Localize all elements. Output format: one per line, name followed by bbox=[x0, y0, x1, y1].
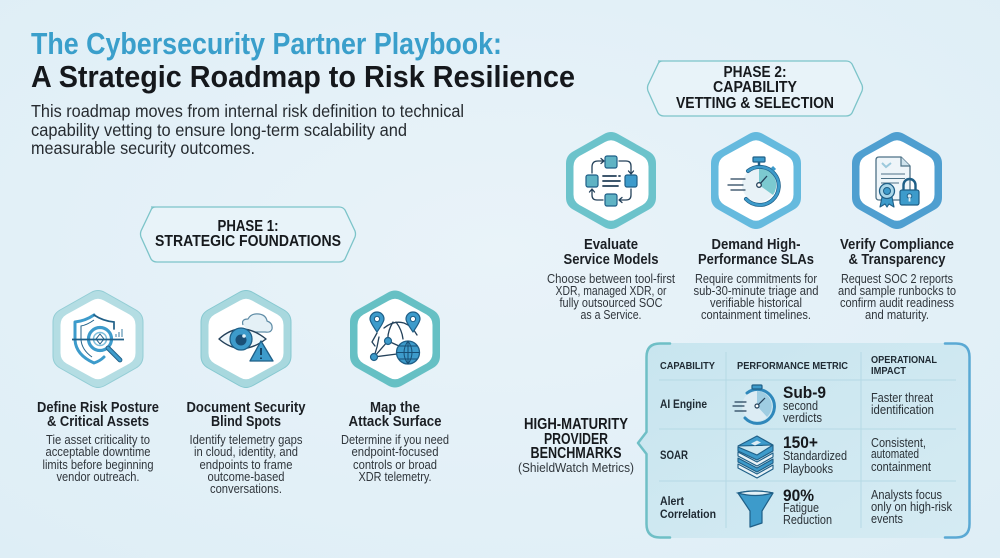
heading: Demand High- bbox=[712, 237, 801, 253]
phase 2 heading bbox=[648, 61, 862, 116]
card: define risk posture bbox=[37, 290, 159, 484]
icon: funnel bbox=[738, 491, 773, 527]
title bbox=[31, 26, 575, 94]
row: Alert Correlation bbox=[660, 486, 952, 527]
benchmarks table panel bbox=[638, 343, 970, 538]
heading: Performance SLAs bbox=[698, 252, 814, 268]
description bbox=[42, 433, 154, 484]
phase 2 heading: CAPABILITY bbox=[713, 79, 798, 96]
description: outcome-based bbox=[208, 470, 285, 484]
intro text bbox=[31, 101, 464, 158]
description: confirm audit readiness bbox=[840, 296, 954, 310]
description: controls or broad bbox=[353, 458, 437, 472]
description: Tie asset criticality to bbox=[46, 433, 150, 447]
heading bbox=[37, 400, 159, 430]
row: Alert Correlation: Reduction bbox=[783, 512, 832, 527]
heading bbox=[698, 237, 814, 268]
heading bbox=[840, 237, 954, 268]
row: SOAR: automated bbox=[871, 446, 919, 461]
description: sub-30-minute triage and bbox=[694, 284, 819, 298]
heading: Verify Compliance bbox=[840, 237, 954, 253]
row: AI Engine: verdicts bbox=[783, 410, 822, 425]
row: AI Engine: Faster threat bbox=[871, 390, 933, 405]
phase 1 heading: PHASE 1: bbox=[218, 218, 278, 235]
description: XDR, managed XDR, or bbox=[556, 284, 666, 298]
heading: Attack Surface bbox=[348, 414, 442, 430]
title: A Strategic Roadmap to Risk Resilience bbox=[31, 59, 575, 94]
description bbox=[694, 272, 819, 322]
card: demand SLAs bbox=[694, 132, 819, 322]
heading bbox=[564, 237, 658, 268]
description: and sample runbocks to bbox=[838, 284, 956, 298]
intro text: This roadmap moves from internal risk definition to technical bbox=[31, 101, 464, 121]
row: SOAR: containment bbox=[871, 459, 931, 474]
benchmarks side label: HIGH-MATURITY bbox=[524, 416, 629, 433]
benchmarks side label: BENCHMARKS bbox=[530, 445, 622, 462]
benchmarks side label bbox=[518, 416, 634, 475]
card: verify compliance bbox=[838, 132, 956, 322]
phase 1 heading bbox=[140, 207, 356, 262]
icon: shield with magnifier bbox=[53, 290, 143, 388]
phase 2 heading: PHASE 2: bbox=[724, 64, 786, 81]
panel background bbox=[638, 343, 970, 538]
table headers: CAPABILITY bbox=[660, 360, 715, 372]
table headers: PERFORMANCE METRIC bbox=[737, 360, 848, 372]
description: verifiable historical bbox=[710, 296, 802, 310]
card: evaluate service models bbox=[547, 132, 675, 322]
icon: stopwatch bbox=[733, 385, 774, 423]
description: Choose between tool-first bbox=[547, 272, 675, 286]
description bbox=[838, 272, 956, 322]
description: in cloud, identity, and bbox=[194, 445, 298, 459]
description: vendor outreach. bbox=[56, 470, 140, 484]
icon: document, seal and lock bbox=[852, 132, 942, 229]
description: conversations. bbox=[210, 482, 282, 496]
description: containment timelines. bbox=[701, 308, 811, 322]
description: fully outsourced SOC bbox=[560, 296, 662, 310]
heading: Document Security bbox=[186, 400, 306, 416]
row: Alert Correlation: Alert bbox=[660, 494, 684, 508]
card: map attack surface bbox=[341, 290, 449, 484]
heading: Evaluate bbox=[584, 237, 638, 253]
row: SOAR bbox=[660, 433, 931, 478]
description: XDR telemetry. bbox=[358, 470, 432, 484]
card: document blind spots bbox=[186, 290, 306, 496]
heading: & Critical Assets bbox=[47, 414, 149, 430]
heading: & Transparency bbox=[848, 252, 946, 268]
intro text: capability vetting to ensure long-term scalability and bbox=[31, 120, 407, 140]
heading: Service Models bbox=[564, 252, 658, 268]
description: and maturity. bbox=[865, 308, 929, 322]
table headers bbox=[660, 354, 938, 377]
benchmarks side label: PROVIDER bbox=[544, 431, 608, 448]
icon: service cycle bbox=[566, 132, 656, 229]
phase 1 heading: STRATEGIC FOUNDATIONS bbox=[155, 233, 341, 250]
description: limits before beginning bbox=[42, 458, 154, 472]
icon: eye with cloud and warning bbox=[201, 290, 291, 388]
description: Request SOC 2 reports bbox=[841, 272, 953, 286]
row: Alert Correlation: events bbox=[871, 511, 903, 526]
description: Determine if you need bbox=[341, 433, 449, 447]
row: SOAR: 150+ bbox=[783, 433, 818, 452]
description: endpoint-focused bbox=[352, 445, 439, 459]
row: Alert Correlation: Correlation bbox=[660, 507, 716, 521]
row: Alert Correlation: Fatigue bbox=[783, 500, 819, 515]
row: AI Engine: second bbox=[783, 398, 818, 413]
heading: Blind Spots bbox=[211, 414, 281, 430]
table headers: OPERATIONAL bbox=[871, 354, 938, 366]
row: SOAR: Standardized bbox=[783, 448, 847, 463]
heading: Map the bbox=[370, 400, 420, 416]
description bbox=[341, 433, 449, 484]
row: SOAR: SOAR bbox=[660, 448, 688, 462]
row: Alert Correlation: 90% bbox=[783, 486, 814, 505]
description: Require commitments for bbox=[695, 272, 817, 286]
description bbox=[547, 272, 675, 322]
phase 2 heading: VETTING & SELECTION bbox=[676, 95, 834, 112]
row: AI Engine: identification bbox=[871, 402, 934, 417]
icon: map with pins and globe bbox=[350, 290, 440, 388]
description bbox=[190, 433, 302, 496]
description: endpoints to frame bbox=[200, 458, 293, 472]
row: AI Engine: AI Engine bbox=[660, 397, 707, 411]
row: Alert Correlation: only on high-risk bbox=[871, 499, 952, 514]
heading: Define Risk Posture bbox=[37, 400, 159, 416]
table headers: IMPACT bbox=[871, 365, 907, 377]
row: SOAR: Playbooks bbox=[783, 461, 833, 476]
benchmarks side label: (ShieldWatch Metrics) bbox=[518, 460, 634, 475]
icon: stopwatch bbox=[711, 132, 801, 229]
row: Alert Correlation: Analysts focus bbox=[871, 487, 942, 502]
description: as a Service. bbox=[580, 308, 642, 322]
heading bbox=[348, 400, 442, 430]
description: acceptable downtime bbox=[46, 445, 151, 459]
description: Identify telemetry gaps bbox=[190, 433, 302, 447]
icon: stacked playbooks bbox=[738, 436, 773, 478]
title: The Cybersecurity Partner Playbook: bbox=[31, 26, 502, 61]
heading bbox=[186, 400, 306, 430]
intro text: measurable security outcomes. bbox=[31, 138, 255, 158]
row: AI Engine bbox=[660, 383, 934, 425]
row: AI Engine: Sub-9 bbox=[783, 383, 826, 402]
row: SOAR: Consistent, bbox=[871, 435, 926, 450]
